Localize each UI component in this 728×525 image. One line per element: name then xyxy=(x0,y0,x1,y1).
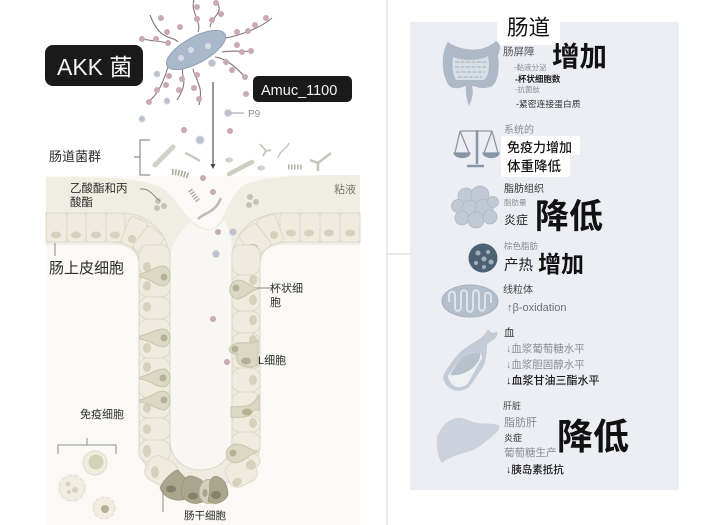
callout: immunity and body weight xyxy=(501,136,580,177)
gut microbiota bacteria xyxy=(155,143,331,219)
heading: 肠道 xyxy=(497,15,560,45)
right crypt wall xyxy=(222,245,260,490)
label: L细胞: L细胞 xyxy=(258,354,286,367)
text: 血浆葡萄糖水平: ↓血浆葡萄糖水平 xyxy=(506,342,585,355)
P9 protein marker: P9 xyxy=(248,109,261,120)
text: β-oxidation: ↑β-oxidation xyxy=(507,302,567,314)
label: AKK 菌 xyxy=(45,45,143,86)
intestinal stem cells xyxy=(160,470,228,503)
text: 血: 血 xyxy=(504,326,515,339)
icon: mitochondrion xyxy=(442,285,498,317)
label: AKK 菌: AKK 菌 xyxy=(57,54,132,80)
icon: liver xyxy=(437,418,499,463)
text: 黏液分泌: -黏液分泌 xyxy=(514,62,547,72)
bracket: gut microbiota xyxy=(134,140,150,175)
label: 免疫细胞: 免疫细胞 xyxy=(80,407,124,421)
label: 肠干细胞: 肠干细胞 xyxy=(184,509,226,522)
text: 紧密连接蛋白质: -紧密连接蛋白质 xyxy=(516,98,581,109)
text: 脂肪肝: 脂肪肝 xyxy=(504,415,537,429)
left surface epithelium xyxy=(46,213,165,260)
icon: intestine xyxy=(443,41,500,106)
emphasis: 降低: 降低 xyxy=(535,198,603,236)
text: 炎症: 炎症 xyxy=(504,212,528,227)
text: 炎症: 炎症 xyxy=(504,432,522,443)
crypt lumen xyxy=(170,220,232,470)
panel: affected organs xyxy=(410,15,679,490)
text: 肠屏障: 肠屏障 xyxy=(503,45,535,58)
callout: immunity and body weight: 体重降低 xyxy=(507,158,561,174)
icon: blood vessel xyxy=(443,329,497,391)
epithelium band xyxy=(46,213,360,486)
label: 肠上皮细胞: 肠上皮细胞 xyxy=(49,260,124,277)
left crypt wall xyxy=(139,245,180,490)
text: 产热: 产热 xyxy=(504,257,533,274)
text: 系统的: 系统的 xyxy=(504,123,534,136)
text: 葡萄糖生产: 葡萄糖生产 xyxy=(504,446,556,459)
illustration: AKK bacterium with flagella xyxy=(139,0,272,105)
immune cells xyxy=(58,438,116,519)
text: 抗菌肽: -抗菌肽 xyxy=(515,84,540,94)
pointer: acetate and propionate xyxy=(140,189,160,201)
text: 脂肪量: 脂肪量 xyxy=(504,197,527,207)
heading: 肠道: 肠道 xyxy=(507,16,550,40)
panel: gut crypt diagram xyxy=(46,175,360,525)
label: 粘液: 粘液 xyxy=(334,182,356,196)
secretion arrow xyxy=(210,82,216,169)
callout: immunity and body weight: 免疫力增加 xyxy=(507,140,572,155)
text: 肝脏: 肝脏 xyxy=(503,400,521,411)
scattered protein dots xyxy=(139,116,259,365)
right surface epithelium xyxy=(238,213,360,258)
text: 杯状细胞数: -杯状细胞数 xyxy=(515,74,561,84)
text: 血浆甘油三酯水平: ↓血浆甘油三酯水平 xyxy=(506,373,600,387)
text: 线粒体: 线粒体 xyxy=(503,283,533,296)
emphasis: 增加: 增加 xyxy=(552,41,607,72)
icon: brown fat xyxy=(468,244,498,272)
label: 杯状细胞: 胞 xyxy=(270,296,281,309)
text: 血浆胆固醇水平: ↓血浆胆固醇水平 xyxy=(506,358,585,371)
text: 胰岛素抵抗: ↓胰岛素抵抗 xyxy=(506,463,564,476)
label: Amuc_1100: Amuc_1100 xyxy=(261,83,337,99)
mucus layer xyxy=(46,175,360,265)
text: 棕色脂肪: 棕色脂肪 xyxy=(504,241,539,251)
pointer: goblet cell xyxy=(257,287,272,289)
label: 肠道菌群: 肠道菌群 xyxy=(49,149,101,164)
label: Amuc_1100 xyxy=(253,76,352,102)
emphasis: 降低: 降低 xyxy=(557,416,629,457)
P9 protein marker xyxy=(224,109,261,120)
label: 乙酸酯和丙酸酯: 乙酸酯和丙 xyxy=(70,183,128,195)
label: 杯状细胞: 杯状细 xyxy=(270,283,303,295)
epithelium pointer line xyxy=(55,243,163,512)
emphasis: 增加: 增加 xyxy=(538,251,584,277)
icon: adipose tissue xyxy=(452,186,498,228)
icon: balance scale xyxy=(454,130,499,166)
text: 脂肪组织: 脂肪组织 xyxy=(504,182,544,195)
label: 乙酸酯和丙酸酯: 酸酯 xyxy=(70,195,93,209)
